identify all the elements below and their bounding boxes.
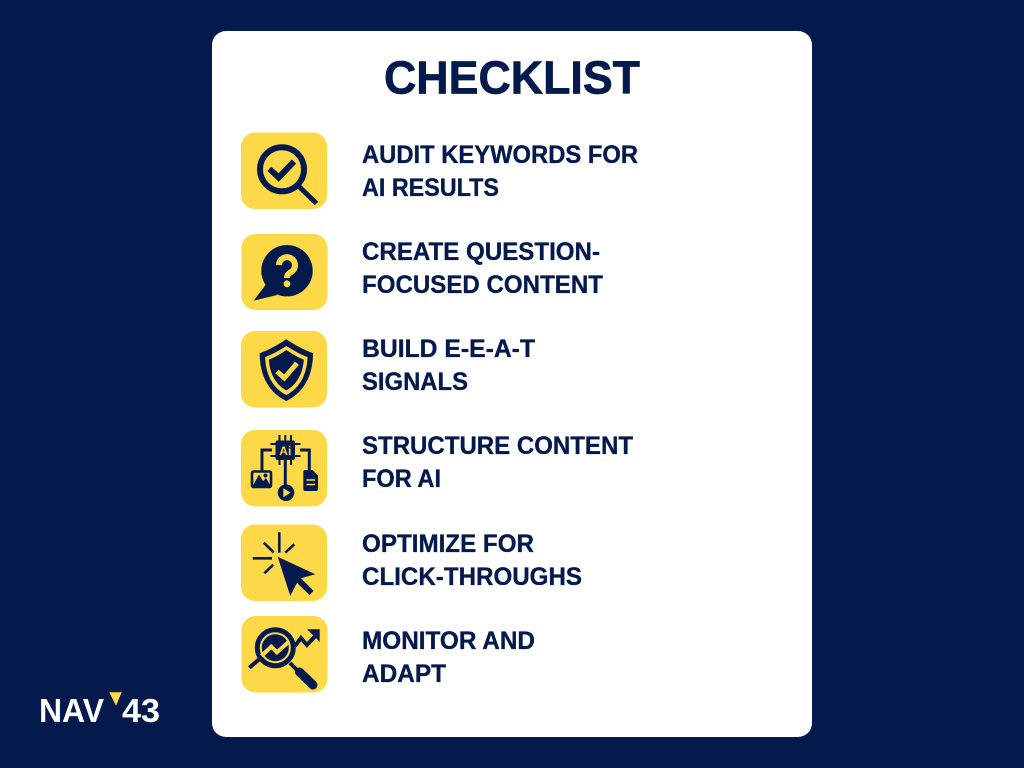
text: question content: CREATE QUESTION- [362,238,600,266]
icon: AI chip with content types: Ai [279,444,291,458]
text: monitor and adapt: ADAPT [362,660,446,688]
text: question content: FOCUSED CONTENT [362,271,603,299]
checklist item: question content [242,234,603,310]
checklist item: audit keywords [241,132,638,209]
text: click-throughs: OPTIMIZE FOR [362,530,534,558]
logo: NAV43: NAV [39,692,104,729]
icon: magnifier with trend arrow [242,616,328,692]
icon: speech bubble with question mark [242,234,328,310]
checklist item: E-E-A-T [241,331,535,408]
checklist item: structure content [241,430,633,506]
text: monitor and adapt [362,627,535,688]
text: click-throughs: CLICK-THROUGHS [362,563,582,591]
icon: cursor click [241,524,327,601]
checklist item: monitor and adapt [242,616,535,692]
text: audit keywords: AUDIT KEYWORDS FOR [362,141,638,169]
icon: shield with check [241,331,327,408]
text: click-throughs [362,530,582,591]
text: structure content: STRUCTURE CONTENT [362,432,633,460]
panel: checklist card [212,31,812,737]
text: audit keywords: AI RESULTS [362,174,499,202]
logo: NAV43: 43 [122,692,160,729]
text: structure content: FOR AI [362,465,441,493]
text: structure content [362,432,633,493]
text: E-E-A-T: BUILD E-E-A-T [362,335,535,363]
text: audit keywords [362,141,638,202]
icon: AI chip with content types [241,430,327,506]
text: monitor and adapt: MONITOR AND [362,627,535,655]
checklist item: click-throughs [241,524,582,601]
text: question content [362,238,603,299]
text: E-E-A-T [362,335,535,396]
logo: NAV43 [39,692,160,729]
title: CHECKLIST [384,52,640,104]
text: E-E-A-T: SIGNALS [362,368,468,396]
icon: magnifier with check [241,132,327,209]
